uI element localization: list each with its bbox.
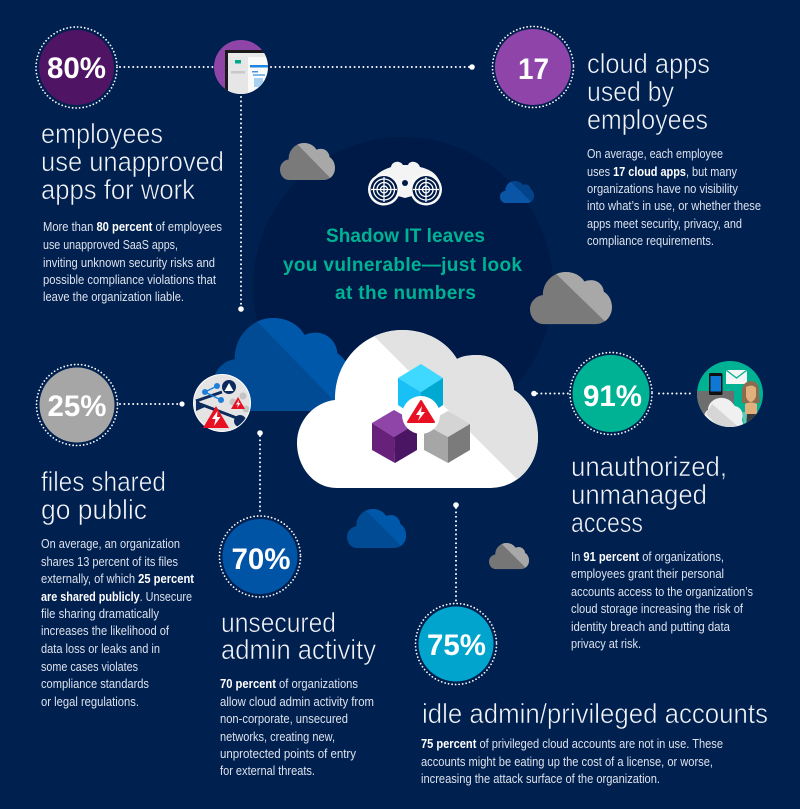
connector: 25% to share icon <box>120 401 185 407</box>
heading: cloud apps used by employees <box>587 48 710 135</box>
body text: 80 percent: possible compliance violations that <box>43 273 216 287</box>
heading: unauthorized unmanaged access <box>571 451 727 538</box>
heading: cloud apps used by employees: used by <box>587 76 674 107</box>
badge: 70%: 70% <box>232 543 290 576</box>
body text: 17 cloud apps: On average, each employee <box>587 147 723 161</box>
icon: file sharing risk <box>193 374 251 432</box>
panel: 80 percent employees <box>36 27 224 304</box>
icon: alert badge <box>402 396 440 434</box>
body text: 25 percent: compliance standards <box>41 677 149 691</box>
body text: 91 percent: privacy at risk. <box>571 637 641 651</box>
cloud: gray top left <box>280 143 335 180</box>
heading: unsecured admin activity: admin activity <box>221 634 376 665</box>
body text: 80 percent: leave the organization liable. <box>43 290 184 304</box>
badge: 91% <box>570 352 652 434</box>
body text: 25 percent: or legal regulations. <box>41 695 139 709</box>
body text: 91 percent: cloud storage increasing the risk of <box>571 602 743 616</box>
panel: 25 percent files <box>36 364 195 709</box>
panel: 91 percent unauthorized access <box>570 352 753 651</box>
connector: 80% to apps to 17 <box>120 64 475 70</box>
heading: idle admin accounts: idle admin/privileged accounts <box>422 698 768 729</box>
heading: unsecured admin activity <box>221 607 376 665</box>
body text: 17 cloud apps <box>587 147 761 248</box>
body text: 70 percent <box>220 677 374 778</box>
body text: 70 percent: non-corporate, unsecured <box>220 712 348 726</box>
body text: 17 cloud apps: apps meet security, privacy, and <box>587 217 742 231</box>
icon: app window <box>214 40 268 94</box>
connector: cloud to 75% <box>453 502 459 602</box>
body text: 91 percent <box>571 550 753 651</box>
body text: 25 percent: On average, an organization <box>41 537 180 551</box>
heading: cloud apps used by employees: cloud apps <box>587 48 710 79</box>
body text: 80 percent: inviting unknown security risks and <box>43 256 215 270</box>
cloud: blue top right <box>500 181 534 203</box>
body text: 91 percent: accounts access to the organization’s <box>571 585 753 599</box>
cloud: blue lower <box>347 509 406 548</box>
badge: 80%: 80% <box>47 52 106 85</box>
panel: 75 percent idle accounts <box>416 604 768 786</box>
body text: 17 cloud apps: into what’s in use, or whether these <box>587 199 761 213</box>
body text: 25 percent: increases the likelihood of <box>41 624 169 638</box>
cloud: gray lower <box>489 543 529 570</box>
body text: 75 percent: accounts might be eating up the cost of a license, or worse, <box>421 755 713 769</box>
body text: 70 percent: networks, creating new, <box>220 730 335 744</box>
body text: 25 percent: file sharing dramatically <box>41 607 160 621</box>
body text: 80 percent <box>43 220 222 304</box>
badge: 75% <box>416 604 496 684</box>
heading: files shared go public: go public <box>41 494 147 525</box>
badge: 25% <box>36 364 118 446</box>
body text: 70 percent: 70 percent of organizations <box>220 677 358 691</box>
body text: 80 percent: use unapproved SaaS apps, <box>43 238 178 252</box>
badge: 75%: 75% <box>427 629 486 662</box>
heading: cloud apps used by employees: employees <box>587 104 708 135</box>
cloud: large blue behind <box>214 318 346 411</box>
body text: 91 percent: In 91 percent of organizations, <box>571 550 724 564</box>
connector: apps down <box>238 97 244 312</box>
central white cloud with cubes <box>297 330 538 488</box>
body text: 17 cloud apps: compliance requirements. <box>587 234 714 248</box>
body text: 75 percent <box>421 737 723 786</box>
heading: employees use unapproved apps: apps for work <box>41 174 196 205</box>
heading: files shared go public: files shared <box>41 466 166 497</box>
badge: 80% <box>36 27 117 108</box>
backdrop circle <box>253 137 553 437</box>
icon: blue cube <box>398 364 443 420</box>
body text: 80 percent: More than 80 percent of employees <box>43 220 222 234</box>
panel: 17 cloud apps <box>492 26 761 248</box>
connector: cloud to 70% <box>257 430 263 514</box>
headline: Shadow IT leaves <box>326 226 485 247</box>
body text: 75 percent: 75 percent of privileged cloud accounts are not in use. These <box>421 737 723 751</box>
connector: cloud to 91% to person <box>531 391 693 396</box>
body text: 70 percent: unprotected points of entry <box>220 747 357 761</box>
body text: 25 percent: shares 13 percent of its files <box>41 555 178 569</box>
icon: gray cube <box>424 411 470 463</box>
badge: 25%: 25% <box>48 390 106 423</box>
headline: at the numbers <box>335 283 476 304</box>
body text: 25 percent: data loss or leaks and in <box>41 642 160 656</box>
heading: unauthorized unmanaged access: unauthorized, <box>571 451 727 482</box>
badge: 91%: 91% <box>583 380 642 413</box>
panel: 70 percent admin <box>220 516 376 778</box>
badge: 17 <box>492 26 574 108</box>
icon: person with devices <box>697 361 763 427</box>
badge: 17: 17 <box>518 53 549 86</box>
heading: employees use unapproved apps <box>41 118 224 205</box>
body text: 75 percent: increasing the attack surface of the organization. <box>421 772 660 786</box>
body text: 91 percent: identity breach and putting data <box>571 620 730 634</box>
body text: 17 cloud apps: organizations have no visibility <box>587 182 739 196</box>
body text: 25 percent: externally, of which 25 percent <box>41 572 195 586</box>
body text: 25 percent: are shared publicly. Unsecure <box>41 590 192 604</box>
headline: you vulnerable—just look <box>283 255 522 276</box>
body text: 91 percent: employees grant their personal <box>571 567 724 581</box>
body text: 25 percent <box>41 537 195 709</box>
heading: employees use unapproved apps: employees <box>41 118 163 149</box>
heading: files shared go public <box>41 466 166 525</box>
body text: 70 percent: for external threats. <box>220 764 315 778</box>
heading: unauthorized unmanaged access: unmanaged <box>571 479 707 510</box>
heading: unauthorized unmanaged access: access <box>571 507 643 538</box>
headline <box>283 226 522 304</box>
body text: 17 cloud apps: uses 17 cloud apps, but many <box>587 165 738 179</box>
body text: 25 percent: some cases violates <box>41 660 138 674</box>
body text: 70 percent: allow cloud admin activity from <box>220 695 374 709</box>
cloud: gray right <box>530 272 612 324</box>
heading: employees use unapproved apps: use unapproved <box>41 146 224 177</box>
icon: purple cube <box>372 410 417 463</box>
badge: 70% <box>220 516 300 597</box>
heading: unsecured admin activity: unsecured <box>221 607 336 638</box>
icon: binoculars <box>368 162 442 206</box>
